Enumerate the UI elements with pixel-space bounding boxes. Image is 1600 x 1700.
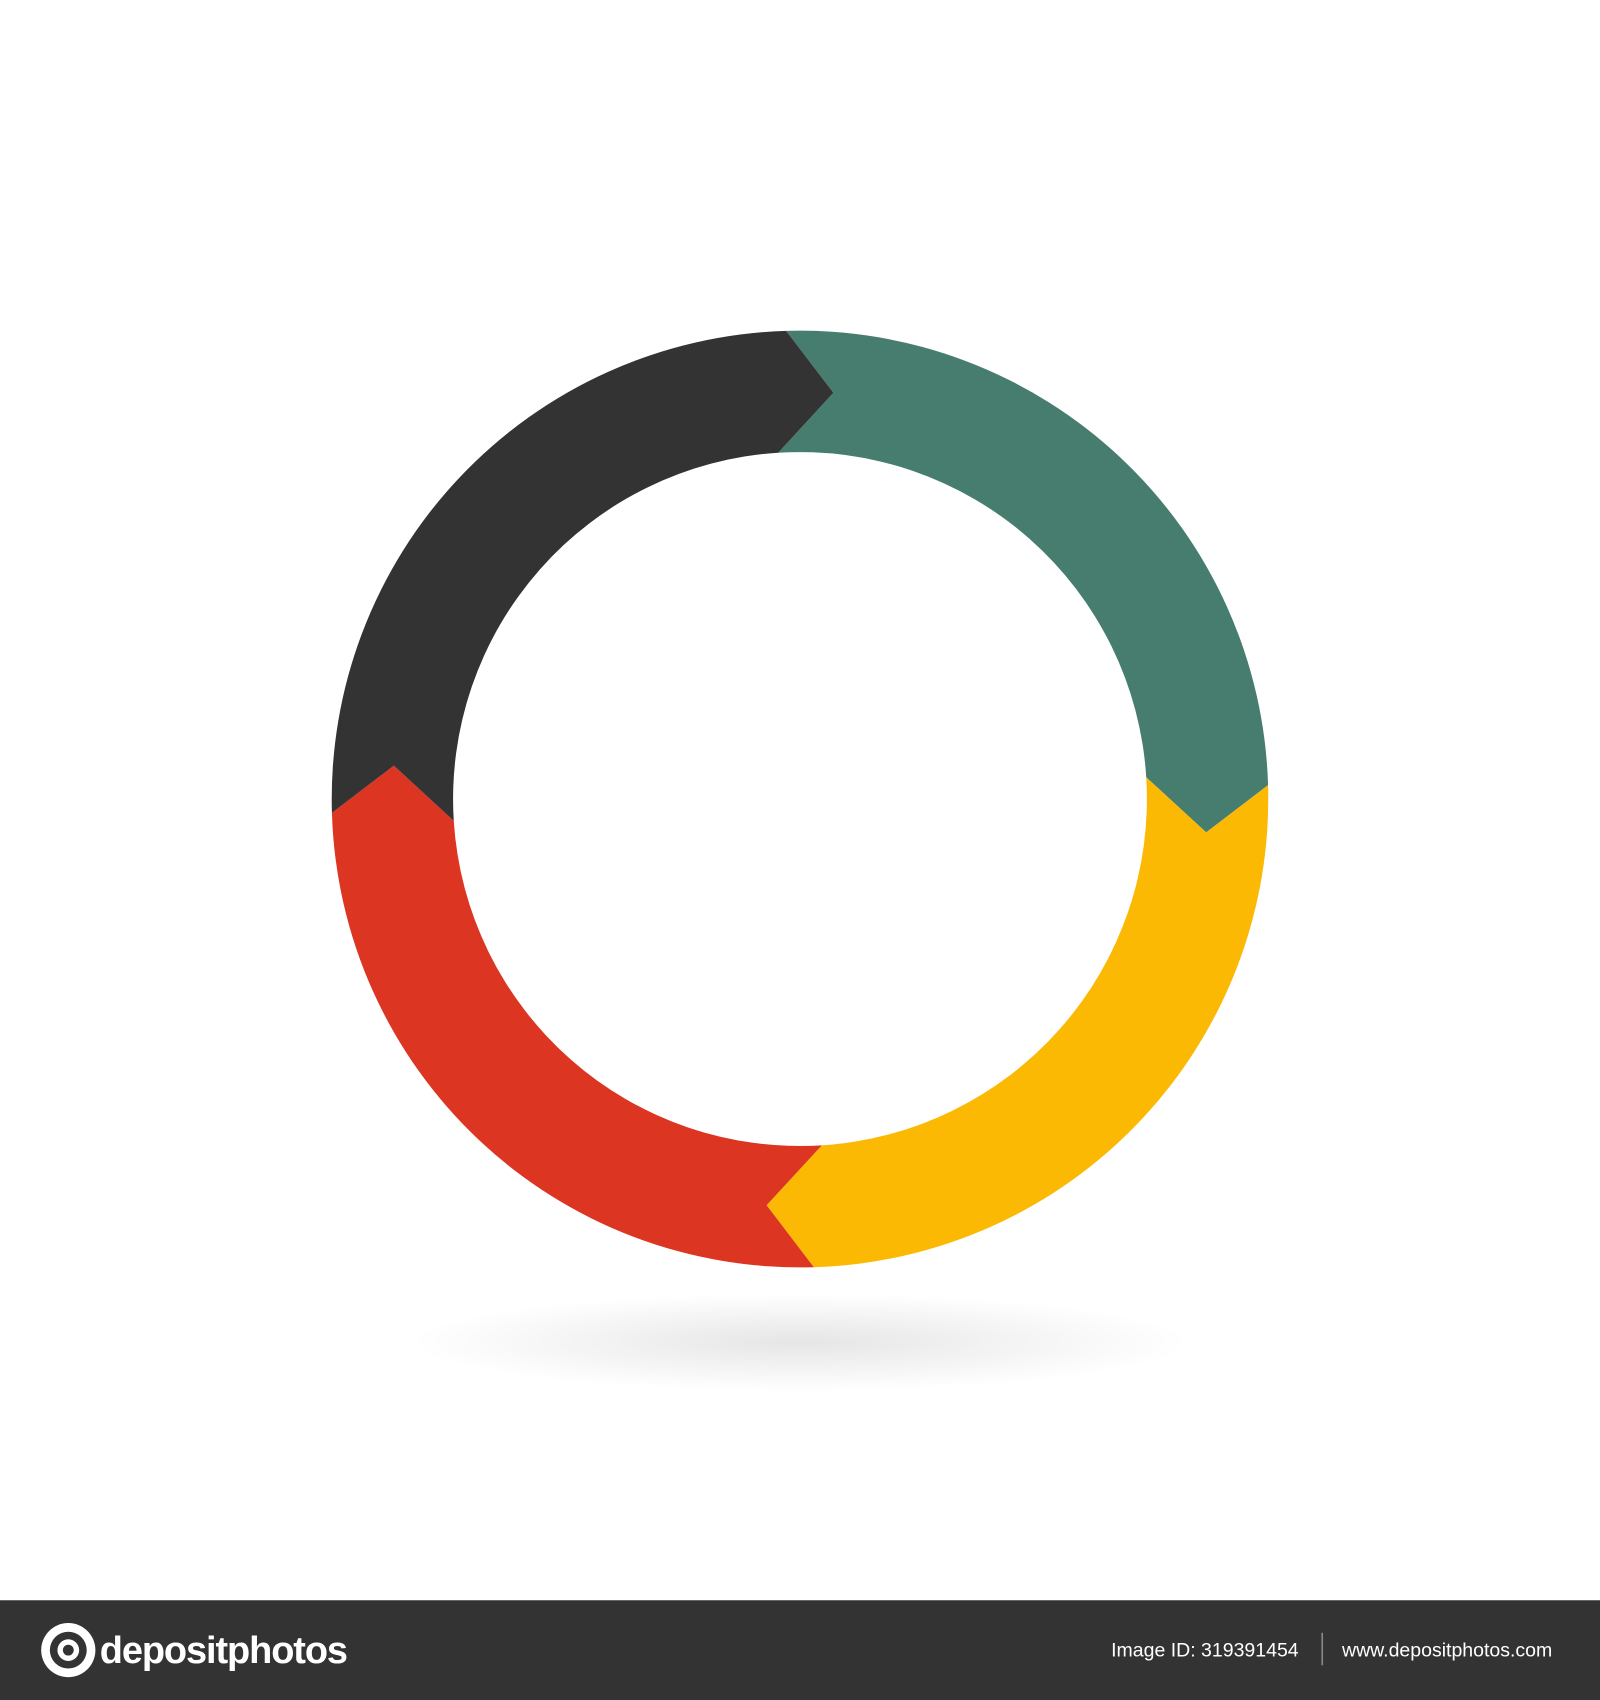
icon: logo camera xyxy=(41,1623,95,1677)
arrow segment: yellow xyxy=(767,777,1268,1267)
arrow segment: red xyxy=(332,766,822,1267)
logo text: depositphotos xyxy=(100,1630,347,1672)
cycle ring xyxy=(332,331,1268,1267)
website: www.depositphotos.com xyxy=(1341,1640,1552,1662)
arrow segment: green xyxy=(778,331,1268,832)
shadow xyxy=(410,1293,1190,1391)
arrow segment: dark xyxy=(332,331,833,821)
image id: Image ID: 319391454 xyxy=(1111,1640,1299,1662)
footer bar xyxy=(0,1600,1600,1700)
